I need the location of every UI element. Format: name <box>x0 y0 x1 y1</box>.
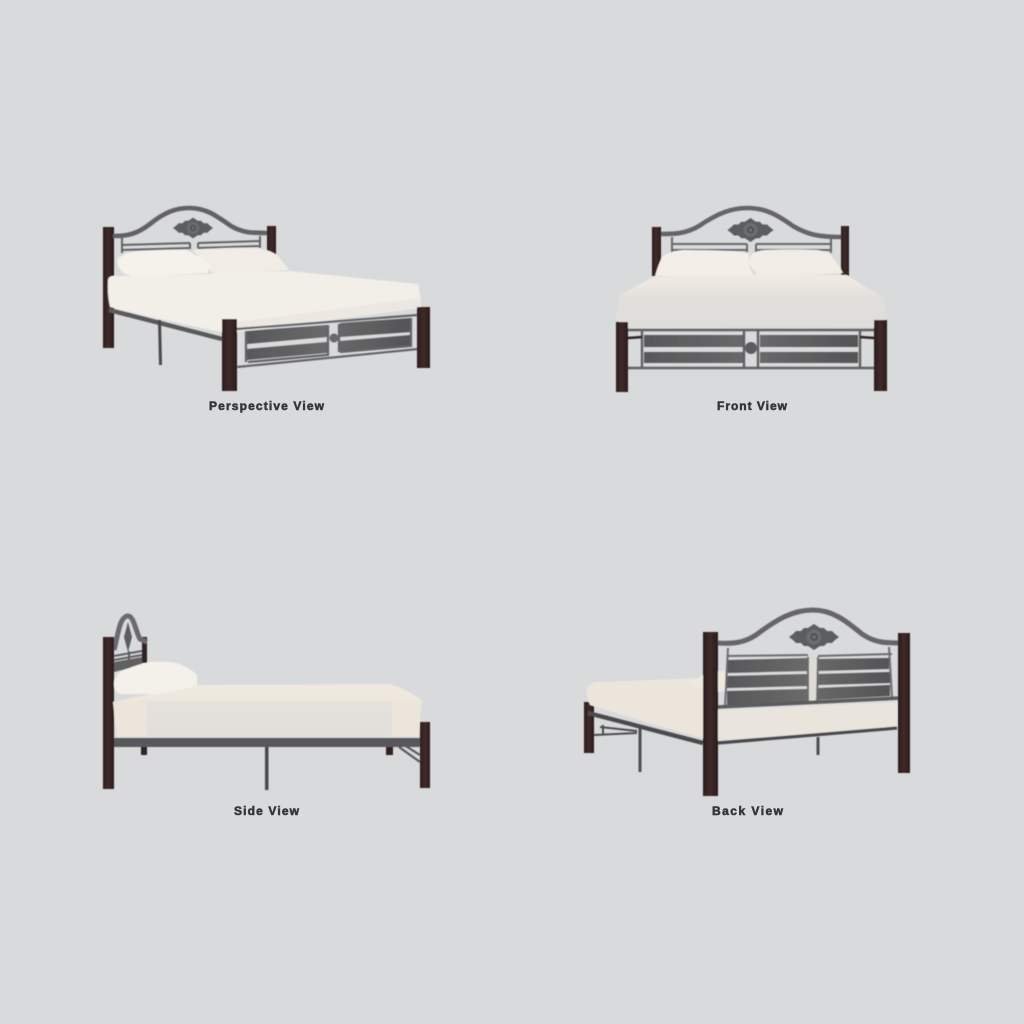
side rail <box>588 713 703 743</box>
near headboard post <box>103 227 114 348</box>
far legs <box>141 747 393 755</box>
right headboard post <box>841 226 849 276</box>
headboard arch <box>718 610 903 643</box>
diagonal brace <box>399 745 420 762</box>
left headboard post <box>652 227 661 276</box>
panel: back view <box>584 610 910 818</box>
right back post <box>898 633 910 773</box>
footboard medallion <box>745 342 757 354</box>
headboard slats <box>727 658 890 705</box>
side rail <box>109 310 222 339</box>
bottom headboard rail <box>718 698 900 707</box>
panel: perspective view <box>103 208 430 413</box>
footboard panels <box>644 335 858 363</box>
footboard side brackets <box>628 337 874 338</box>
lower mattress <box>718 702 897 740</box>
headboard rails <box>114 651 142 668</box>
bed: back <box>584 610 910 796</box>
mattress <box>615 275 887 328</box>
footboard rails <box>237 315 418 367</box>
far frame rails <box>594 725 637 735</box>
pillows <box>193 248 289 274</box>
headboard arch <box>661 208 841 237</box>
headboard ornament <box>727 218 774 242</box>
gap behind headboard <box>808 660 818 702</box>
label: side view: Side View <box>234 804 300 818</box>
footboard rails <box>628 330 874 368</box>
front foot post <box>222 319 237 391</box>
back headboard post <box>142 637 147 663</box>
far corner post <box>584 702 594 753</box>
right foot post <box>417 307 430 368</box>
label: back view: Back View <box>712 804 784 818</box>
right foot post <box>874 320 887 391</box>
footboard panels <box>246 318 411 360</box>
mattress end shade <box>113 699 422 737</box>
far headboard post <box>267 226 276 255</box>
panel: front view <box>615 208 887 413</box>
left foot post <box>616 322 628 392</box>
foot post <box>420 722 430 788</box>
pillow behind headboard <box>688 670 725 692</box>
mattress <box>113 684 422 737</box>
headboard frame <box>725 647 892 706</box>
panel: side view <box>103 616 430 818</box>
side rail <box>114 738 420 747</box>
bed: front <box>615 208 887 392</box>
headboard ornament <box>789 624 839 650</box>
footboard medallion <box>330 334 338 342</box>
pillow <box>114 662 197 694</box>
bed: perspective <box>103 208 430 391</box>
headboard arch <box>114 616 147 650</box>
legs <box>640 728 818 772</box>
mattress edge shade <box>222 298 421 332</box>
headboard fill shadow <box>114 657 142 672</box>
headboard ornament <box>124 622 132 652</box>
mattress <box>108 271 421 332</box>
center leg <box>160 320 161 365</box>
head post <box>103 637 114 789</box>
pillows <box>748 250 843 275</box>
side mattress <box>587 678 703 738</box>
headboard rails <box>122 236 260 253</box>
headboard rails <box>672 237 831 253</box>
label: perspective view: Perspective View <box>209 399 325 413</box>
label: front view: Front View <box>717 399 788 413</box>
left back post <box>703 632 718 796</box>
bed: side <box>103 616 430 790</box>
bottom rail <box>718 728 897 743</box>
headboard ornament <box>173 218 213 238</box>
headboard arch <box>113 208 267 236</box>
center leg <box>265 747 268 790</box>
